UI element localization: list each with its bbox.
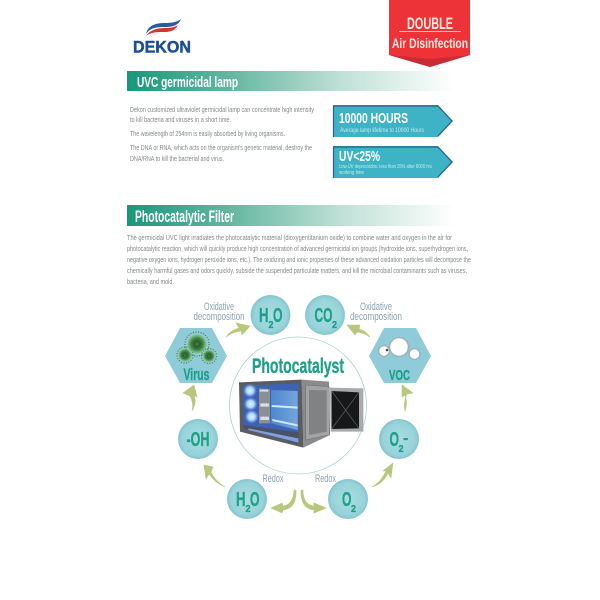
arrow: -OH to virus — [183, 385, 197, 411]
text block: photocatalytic description: bacteria, and mold. — [127, 277, 174, 286]
badge: double air disinfection — [389, 0, 470, 67]
label: redox left: Redox — [262, 473, 284, 485]
badge heading: DOUBLE — [407, 14, 453, 33]
text block: photocatalytic description: chemically harmful gases and odors quickly, subside the suspended particulate matters, and kill the microbial contaminants such as viruses, — [127, 266, 467, 275]
heading bar: UVC germicidal lamp: UVC germicidal lamp — [137, 74, 238, 91]
callout: UV<25%: Low UV depreciation: less than 25% after 8000 hrs — [339, 164, 432, 170]
callout: UV<25%: UV<25% — [339, 148, 380, 165]
logo: DEKON — [133, 19, 191, 56]
text block: UVC description: The wavelength of 254nm is easily absorbed by living organisms. — [130, 129, 285, 138]
diagram: photocatalyst cycle — [165, 295, 431, 519]
arrow: H2O to -OH — [204, 465, 225, 487]
node: O2-: - — [403, 430, 408, 447]
node: CO2: CO — [314, 305, 332, 327]
callout: 10000 hours: Average lamp lifetime to 10000 Hours — [340, 128, 424, 134]
node: H2O: H — [236, 489, 246, 511]
node: O2: 2 — [351, 504, 356, 515]
text block: photocatalytic description — [127, 233, 471, 286]
node: H2O oxidised: H — [259, 305, 268, 327]
icon: VOC molecule — [378, 338, 420, 360]
callout: UV<25% — [333, 146, 453, 178]
label: oxidative decomposition right: decomposition — [350, 311, 402, 323]
center title: Photocatalyst — [252, 355, 344, 378]
text block: UVC description — [130, 105, 314, 163]
arrow: VOC to CO2 — [347, 325, 370, 337]
node: O2: O — [342, 489, 352, 511]
text block: photocatalytic description: The germicidal UVC light irradiates the photocatalytic material (dioxygentitanium oxide) to combine water and oxygen in the air for — [127, 233, 452, 242]
center circle outline — [230, 337, 366, 474]
node: O2-: 2 — [398, 444, 404, 455]
arrow: O2 to O2- — [372, 463, 393, 487]
label: oxidative decomposition left: decomposition — [194, 311, 244, 323]
callout: UV<25%: working time — [338, 170, 364, 176]
callout: 10000 hours — [333, 105, 453, 137]
node: H2O oxidised: 2 — [268, 320, 274, 331]
label: redox right: Redox — [315, 473, 336, 485]
heading bar: UVC germicidal lamp — [127, 71, 455, 91]
heading bar: Photocatalytic Filter — [127, 205, 455, 226]
node: H2O oxidised: O — [273, 305, 282, 327]
photocatalyst device image — [239, 380, 363, 448]
logo wordmark: DEKON — [133, 38, 191, 56]
text block: UVC description: Dekon customized ultraviolet germicidal lamp can concentrate high intensity — [130, 105, 314, 114]
heading bar: Photocatalytic Filter: Photocatalytic Filter — [135, 208, 234, 226]
arrow: redox to O2 — [301, 490, 326, 513]
node: CO2 — [305, 295, 345, 335]
label: oxidative decomposition right — [350, 301, 402, 323]
node: VOC — [369, 328, 431, 384]
text block: UVC description: DNA/RNA to kill the bacterial and virus. — [130, 154, 224, 163]
node: H2O — [227, 479, 267, 519]
node: Virus: Virus — [184, 366, 210, 384]
label: oxidative decomposition left: Oxidative — [204, 301, 234, 313]
node: O2- — [379, 419, 419, 459]
node: VOC: VOC — [389, 367, 410, 384]
arrow: O2- to VOC — [402, 385, 413, 411]
node: O2-: O — [390, 429, 399, 451]
icon: logo swoosh — [146, 19, 181, 36]
text block: UVC description: to kill bacteria and viruses in a short time. — [130, 115, 231, 124]
node: H2O oxidised — [250, 295, 290, 335]
node: H2O: O — [250, 489, 260, 511]
text block: UVC description: The DNA or RNA, which acts on the organism's genetic material, destroy the — [130, 143, 312, 152]
icon: virus particles — [177, 332, 216, 364]
label: oxidative decomposition left — [194, 301, 244, 323]
label: oxidative decomposition right: Oxidative — [360, 301, 392, 313]
node: -OH: -OH — [186, 429, 210, 451]
node: -OH — [178, 419, 218, 459]
arrow: redox to H2O — [271, 490, 296, 513]
text block: photocatalytic description: photocatalytic reaction, which will quickly produce high concentration of advanced germicidal ion groups (hydroxide ions, superhydrogen ions, — [127, 244, 468, 253]
badge subheading: Air Disinfection — [392, 35, 468, 51]
arrow: virus to H2O — [226, 323, 250, 337]
node: Virus — [165, 328, 227, 384]
text block: photocatalytic description: negative oxygen ions, hydrogen peroxide ions, etc.). The oxidizing and ionic properties of these advanced oxidation particles will decompose the — [127, 255, 471, 264]
node: CO2: 2 — [332, 320, 337, 331]
node: H2O: 2 — [246, 504, 251, 515]
node: O2 — [328, 479, 368, 519]
callout: 10000 hours: 10000 HOURS — [339, 110, 408, 127]
